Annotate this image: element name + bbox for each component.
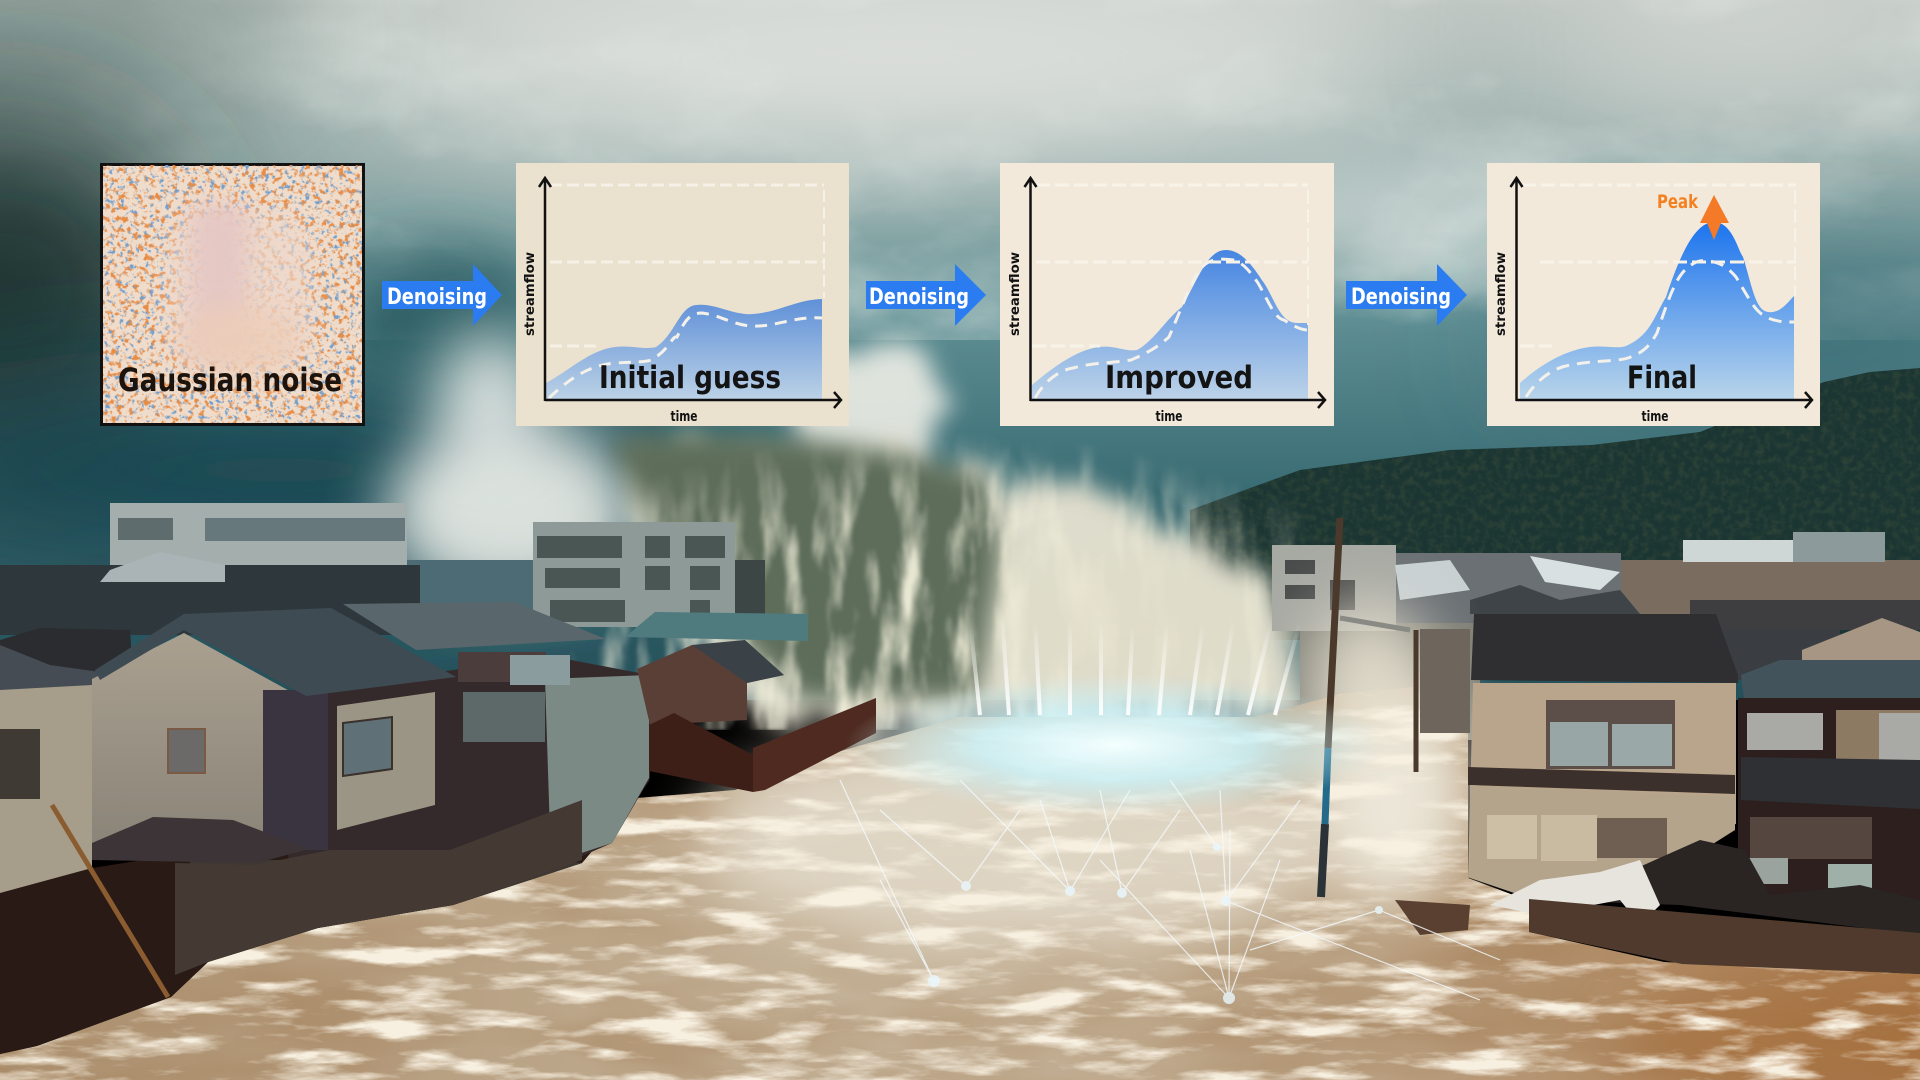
label: time: time	[1156, 409, 1182, 425]
house: lower panels	[1487, 815, 1667, 861]
panel: Gaussian noise	[102, 164, 364, 424]
house: balcony	[458, 652, 570, 742]
label: Gaussian noise: Gaussian noise	[118, 361, 342, 399]
house: front roof	[1471, 614, 1738, 683]
house: right lower windows	[1750, 817, 1872, 859]
house: side window	[343, 717, 392, 776]
arrow: Denoising 3: Denoising	[1351, 285, 1451, 310]
y axis	[1024, 178, 1036, 401]
dashed target curve	[1526, 261, 1794, 397]
label: streamflow: streamflow	[1008, 252, 1023, 336]
house: main window	[1546, 700, 1675, 769]
x axis	[1030, 392, 1325, 408]
dashed guide lines	[550, 185, 824, 346]
houses left	[0, 602, 876, 1054]
background: storm sky	[0, 0, 1920, 700]
data network lines on water	[840, 780, 1500, 1004]
house: grey annex	[1420, 629, 1470, 733]
label: Peak: Peak	[1657, 191, 1698, 213]
light glow on water	[845, 675, 1385, 815]
x axis	[545, 392, 841, 408]
dashed target curve	[549, 313, 822, 398]
wave and spray plume	[385, 330, 1310, 730]
utility pole	[1321, 518, 1416, 897]
house: dark wall section	[263, 690, 328, 850]
flooded water	[0, 600, 1920, 1080]
house: side wall	[337, 692, 435, 830]
area: streamflow estimate	[1032, 250, 1308, 400]
arrow: Denoising 1	[382, 264, 502, 326]
house: right windows	[1747, 713, 1920, 761]
distant buildings right	[1272, 532, 1920, 740]
house: upper gable	[1802, 618, 1920, 660]
y axis	[539, 178, 551, 401]
chart: Final	[1487, 163, 1820, 426]
dashed guide lines	[1520, 185, 1796, 346]
house: right dark house	[1738, 698, 1920, 903]
house: small window	[168, 729, 205, 773]
arrow: Denoising 1: Denoising	[387, 285, 487, 310]
house: right mid roof	[1741, 757, 1920, 809]
y axis	[1510, 178, 1522, 401]
house: lower dark storey	[0, 780, 650, 1054]
house: rear roof	[1720, 630, 1840, 680]
house: porch roof	[92, 817, 309, 863]
house: lower storey	[1470, 785, 1735, 895]
label: Final: Final	[1627, 360, 1697, 396]
house: grey side block	[545, 675, 649, 863]
x axis	[1516, 392, 1812, 408]
debris pile	[1540, 840, 1920, 935]
brown house	[637, 640, 876, 792]
peak arrow	[1700, 195, 1729, 240]
house: dark back block	[0, 628, 135, 760]
dashed guide lines	[1032, 185, 1308, 346]
houses right	[1395, 614, 1920, 974]
house: second roof	[343, 602, 606, 650]
house: front wall	[1468, 683, 1736, 878]
house: patterned roof	[1741, 660, 1920, 698]
label: time: time	[1642, 409, 1668, 425]
leaning pole	[52, 805, 168, 997]
label: Improved: Improved	[1105, 360, 1253, 396]
area: streamflow estimate	[546, 299, 822, 400]
label: streamflow: streamflow	[1494, 252, 1509, 336]
house: right house wall	[1836, 710, 1920, 770]
arrow: Denoising 2	[866, 264, 986, 326]
teal roof	[625, 612, 808, 641]
sea wall	[1529, 899, 1920, 974]
house: front band	[1468, 767, 1735, 794]
label: Initial guess: Initial guess	[599, 360, 781, 396]
house: porch walls	[175, 800, 582, 975]
house: main wall	[92, 633, 306, 847]
arrow: Denoising 3	[1346, 264, 1467, 326]
house: tall porch wall	[265, 655, 650, 870]
label: streamflow: streamflow	[523, 252, 538, 336]
area: streamflow estimate	[1520, 222, 1794, 400]
label: time: time	[670, 409, 698, 425]
distant buildings left	[0, 503, 765, 635]
chart: Improved	[1000, 163, 1334, 426]
dashed target curve	[1035, 259, 1308, 398]
house: main roof	[95, 608, 456, 696]
arrow: Denoising 2: Denoising	[869, 285, 969, 310]
house: stone building	[0, 645, 100, 895]
rising light rays	[968, 610, 1302, 716]
mountain and forest	[1190, 368, 1920, 640]
chart: Initial guess	[516, 163, 849, 426]
